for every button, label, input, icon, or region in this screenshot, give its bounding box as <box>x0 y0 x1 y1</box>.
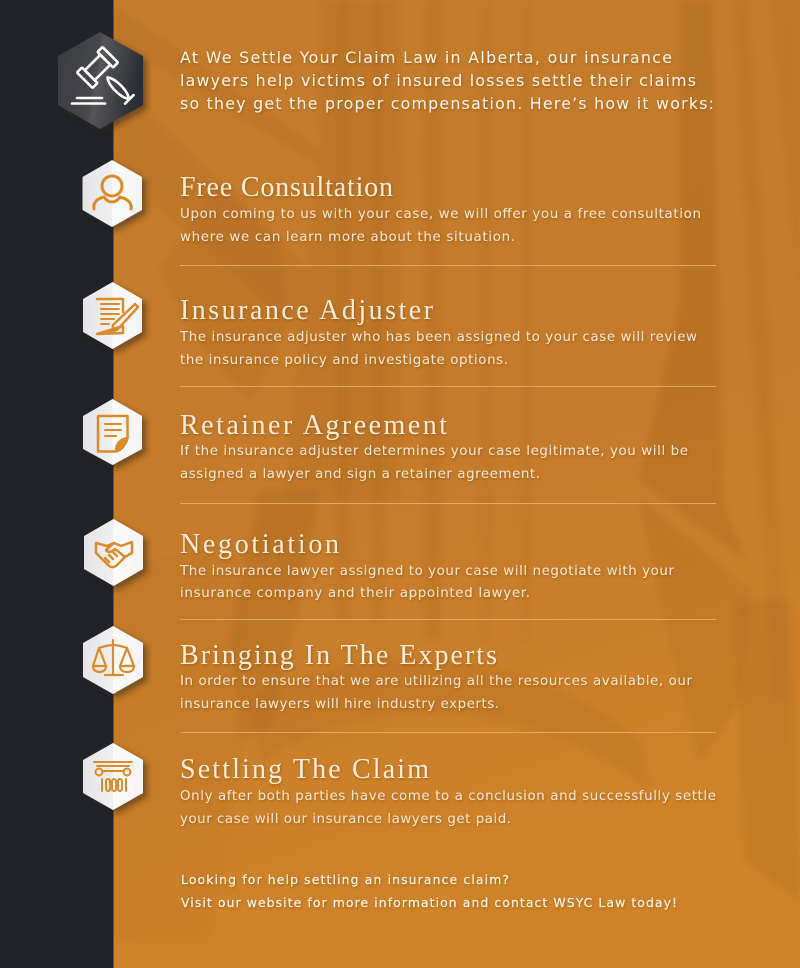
icon: gavel badge <box>58 32 143 129</box>
icon: person badge <box>82 160 142 227</box>
step: Retainer Agreement <box>180 410 688 482</box>
step: Retainer Agreement: If the insurance adjuster determines your case legitimate, you will be <box>180 444 688 459</box>
step: Insurance Adjuster <box>179 295 697 368</box>
step: Negotiation: Negotiation <box>180 529 339 560</box>
step: Free Consultation: Free Consultation <box>180 172 393 203</box>
step: Free Consultation <box>180 172 701 245</box>
intro text: At We Settle Your Claim Law in Alberta, our insurance <box>180 48 672 67</box>
step: Retainer Agreement: assigned a lawyer and sign a retainer agreement. <box>180 467 540 482</box>
step: Insurance Adjuster: The insurance adjuster who has been assigned to your case will review <box>179 330 697 345</box>
step: Free Consultation: Upon coming to us with your case, we will offer you a free consultation <box>180 207 701 222</box>
step: Retainer Agreement: Retainer Agreement <box>180 410 447 441</box>
step: Insurance Adjuster: the insurance policy and investigate options. <box>180 353 508 368</box>
intro text <box>180 48 714 113</box>
step: Bringing In The Experts: In order to ensure that we are utilizing all the resources available, our <box>180 674 692 689</box>
step: Negotiation: insurance company and their appointed lawyer. <box>180 586 530 601</box>
step: Settling The Claim: your case will our insurance lawyers get paid. <box>180 812 511 827</box>
intro text: so they get the proper compensation. Here’s how it works: <box>180 94 714 113</box>
step: Bringing In The Experts <box>180 640 692 712</box>
step: Negotiation <box>179 529 674 601</box>
step: Settling The Claim: Only after both parties have come to a conclusion and successfully settle <box>180 789 716 804</box>
icon: document and pen badge <box>83 282 142 349</box>
closing call to action <box>181 872 677 910</box>
step: Negotiation: The insurance lawyer assigned to your case will negotiate with your <box>179 564 674 579</box>
icon: page badge <box>83 399 142 465</box>
icon: handshake badge <box>84 519 143 586</box>
step: Settling The Claim <box>180 754 716 827</box>
step: Bringing In The Experts: Bringing In The Experts <box>180 640 497 671</box>
dark sidebar <box>0 0 114 968</box>
step: Bringing In The Experts: insurance lawyers will hire industry experts. <box>180 697 499 712</box>
closing call to action: Visit our website for more information and contact WSYC Law today! <box>181 895 677 910</box>
icon: scales badge <box>83 626 143 694</box>
icon: column capital badge <box>83 743 143 810</box>
closing call to action: Looking for help settling an insurance claim? <box>181 872 509 887</box>
step: Free Consultation: where we can learn more about the situation. <box>180 230 515 245</box>
step: Insurance Adjuster: Insurance Adjuster <box>180 295 434 326</box>
intro text: lawyers help victims of insured losses settle their claims <box>180 71 696 90</box>
step: Settling The Claim: Settling The Claim <box>180 754 429 785</box>
